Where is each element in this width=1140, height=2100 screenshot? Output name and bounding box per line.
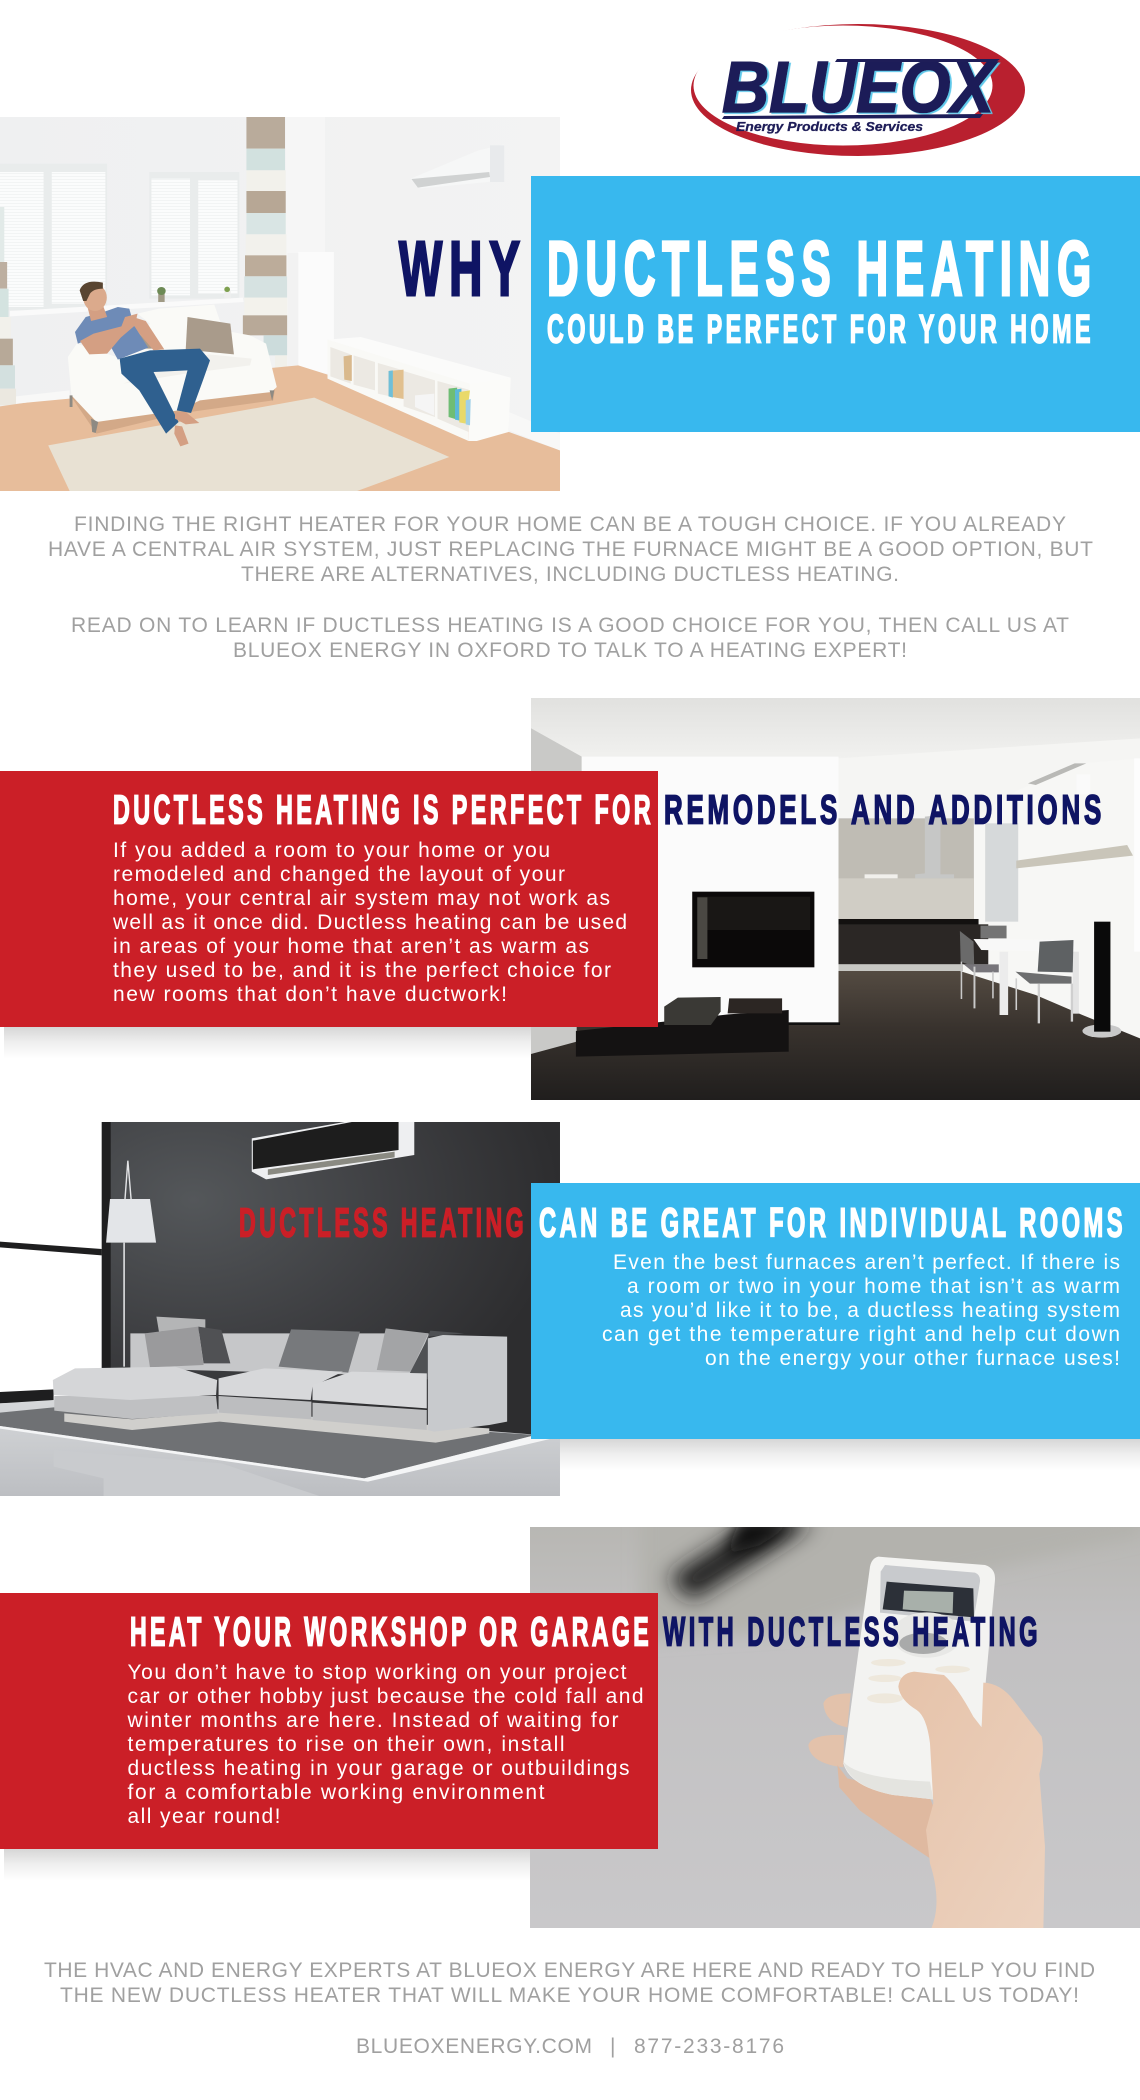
body text: workshop: car or other hobby just because the cold fall and	[128, 1685, 644, 1708]
intro text: HAVE A CENTRAL AIR SYSTEM, JUST REPLACING THE FURNACE MIGHT BE A GOOD OPTION, BUT	[48, 538, 1093, 561]
photo: man on sofa with remote in bright living room	[0, 117, 560, 491]
intro text: THERE ARE ALTERNATIVES, INCLUDING DUCTLESS HEATING.	[241, 563, 899, 586]
forearm	[80, 314, 137, 354]
panel: blue individual rooms shadow	[560, 1439, 1140, 1471]
body text: workshop	[126, 1661, 644, 1828]
TV	[692, 892, 814, 967]
footer text	[44, 1959, 1095, 2058]
fingers	[808, 1693, 851, 1767]
logo rule lines	[722, 59, 1000, 119]
floor	[530, 971, 1140, 1100]
section heading: workshop or garage: HEAT YOUR WORKSHOP OR GARAGE	[130, 1608, 652, 1654]
photo: modern white living room and kitchen	[530, 695, 1140, 1100]
rug	[48, 398, 449, 491]
tower speaker	[1082, 922, 1121, 1038]
body text: individual rooms: Even the best furnaces aren’t perfect. If there is	[613, 1251, 1120, 1274]
head	[80, 282, 107, 321]
curtain main	[246, 117, 285, 149]
body text: individual rooms: a room or two in your home that isn’t as warm	[627, 1275, 1120, 1298]
body text: individual rooms: can get the temperature right and help cut down	[602, 1323, 1120, 1346]
pillow	[186, 317, 234, 354]
sofa	[53, 1317, 507, 1443]
body text: workshop: for a comfortable working environment	[128, 1781, 545, 1804]
body text: individual rooms: as you’d like it to be, a ductless heating system	[620, 1299, 1120, 1322]
chaise	[54, 1396, 218, 1419]
panel: blue individual rooms box	[531, 1183, 1140, 1439]
logo tagline: Energy Products & Services	[736, 119, 923, 134]
footer contact line	[356, 2035, 784, 2058]
cushions behind	[156, 1317, 205, 1332]
section heading: individual rooms: DUCTLESS HEATING	[239, 1200, 527, 1246]
kitchen counter	[839, 919, 979, 925]
footer contact line: |	[610, 2035, 615, 2058]
panel: red remodels box	[0, 771, 658, 1027]
title	[399, 226, 1098, 352]
body text: remodels	[112, 839, 627, 1006]
AC unit	[252, 1122, 414, 1179]
logo: Blueox Energy Products & Services	[691, 24, 1025, 156]
intro text: FINDING THE RIGHT HEATER FOR YOUR HOME CAN BE A TOUGH CHOICE. IF YOU ALREADY	[74, 513, 1066, 536]
speaker box	[728, 998, 782, 1013]
shirt	[75, 307, 148, 360]
kitchen hood	[915, 815, 954, 878]
dark wall	[102, 1120, 560, 1440]
body text: remodels: in areas of your home that aren’t as warm as	[113, 935, 589, 958]
body text: individual rooms	[602, 1251, 1120, 1370]
body text: remodels: well as it once did. Ductless heating can be used	[112, 911, 627, 934]
jeans	[120, 349, 210, 434]
intro text	[48, 513, 1093, 662]
left arm	[133, 317, 164, 350]
floor	[0, 1400, 560, 1497]
body text: workshop: temperatures to rise on their own, install	[128, 1733, 564, 1756]
intro text: BLUEOX ENERGY IN OXFORD TO TALK TO A HEATING EXPERT!	[233, 639, 907, 662]
sofa floor shadow	[71, 389, 275, 434]
window frame	[0, 1242, 102, 1403]
photo: dark wall lounge with sofa and wall unit	[0, 1120, 560, 1497]
body text: workshop: winter months are here. Instead of waiting for	[126, 1709, 618, 1732]
footer contact line: 877-233-8176	[634, 2035, 784, 2058]
AC unit	[411, 144, 504, 188]
floor	[0, 365, 560, 491]
body text: workshop: all year round!	[128, 1805, 280, 1828]
TV console	[576, 1010, 789, 1057]
panel: red workshop shadow	[4, 1849, 530, 1881]
panel: title block blue	[531, 176, 1140, 432]
body text: remodels: they used to be, and it is the perfect choice for	[113, 959, 611, 982]
dining chairs and table	[960, 926, 1079, 1023]
body text: remodels: new rooms that don’t have ductwork!	[113, 983, 507, 1006]
logo wordmark: BLUEOX	[722, 48, 998, 128]
section heading: remodels and additions: DUCTLESS HEATING IS PERFECT FOR	[113, 786, 654, 832]
rug	[0, 1407, 536, 1478]
body text: remodels: home, your central air system may not work as	[113, 887, 610, 910]
shelf	[327, 337, 511, 384]
footer text: THE NEW DUCTLESS HEATER THAT WILL MAKE YOUR HOME COMFORTABLE! CALL US TODAY!	[60, 1984, 1079, 2007]
lamp	[106, 1161, 156, 1367]
thumb and palm	[898, 1672, 1045, 1930]
arm	[428, 1335, 507, 1432]
sofa	[68, 305, 277, 422]
body text: workshop: You don’t have to stop working on your project	[128, 1661, 627, 1684]
kitchen splashback	[839, 818, 974, 922]
footer contact line: BLUEOXENERGY.COM	[356, 2035, 592, 2058]
window left	[0, 164, 107, 310]
baseboard	[16, 390, 560, 450]
panel: red workshop box	[0, 1593, 658, 1849]
right wall features	[985, 823, 1018, 922]
body text: remodels: If you added a room to your home or you	[113, 839, 550, 862]
lower palm	[837, 1765, 935, 1858]
body text: remodels: remodeled and changed the layout of your	[113, 863, 565, 886]
intro text: READ ON TO LEARN IF DUCTLESS HEATING IS A GOOD CHOICE FOR YOU, THEN CALL US AT	[71, 614, 1069, 637]
photo: hand holding remote control	[530, 1500, 1140, 1930]
body text: individual rooms: on the energy your other furnace uses!	[705, 1347, 1120, 1370]
seat cushions	[219, 1368, 343, 1400]
floor reflection	[104, 1479, 318, 1496]
remote	[843, 1557, 995, 1799]
amplifier	[664, 997, 721, 1025]
feet	[174, 412, 199, 446]
section heading: individual rooms	[239, 1200, 1126, 1246]
panel: red remodels shadow	[4, 1027, 658, 1059]
curtain left	[0, 207, 4, 262]
plinth	[64, 1413, 489, 1443]
title word WHY: WHY	[399, 226, 527, 312]
man	[75, 282, 210, 446]
body text: workshop: ductless heating in your garage or outbuildings	[128, 1757, 630, 1780]
column	[316, 252, 334, 374]
logo swoosh oval	[691, 24, 1025, 156]
footer text: THE HVAC AND ENERGY EXPERTS AT BLUEOX ENERGY ARE HERE AND READY TO HELP YOU FIND	[44, 1959, 1095, 1982]
